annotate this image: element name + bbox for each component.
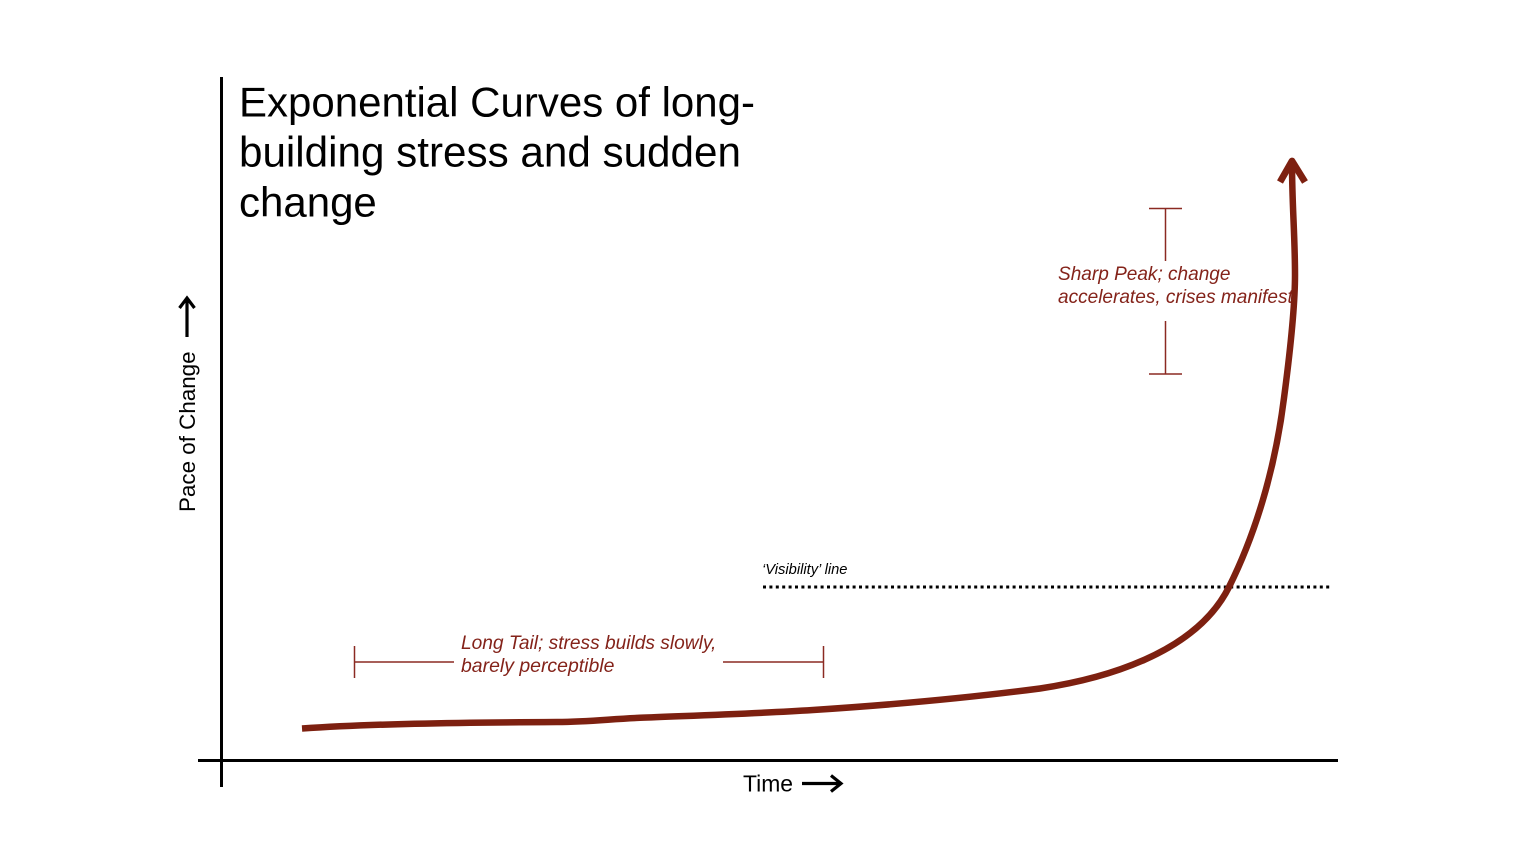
title: building stress and sudden <box>239 128 741 176</box>
x axis <box>198 759 1338 762</box>
x axis label <box>743 770 841 796</box>
title: change <box>239 178 377 226</box>
icon: x axis arrow <box>802 776 841 792</box>
sharp peak bracket <box>1149 208 1182 374</box>
icon: y axis arrow <box>180 298 194 337</box>
icon: curve arrowhead <box>1280 161 1305 182</box>
x axis label: Time <box>743 770 793 796</box>
y axis <box>220 77 223 787</box>
long tail label: Long Tail; stress builds slowly, <box>461 633 716 654</box>
exponential curve <box>302 163 1295 728</box>
visibility dotted line <box>763 586 1330 588</box>
long tail label: barely perceptible <box>461 655 615 677</box>
visibility label: ‘Visibility’ line <box>762 562 847 578</box>
sharp peak label: Sharp Peak; change <box>1058 264 1230 285</box>
long tail bracket <box>354 646 824 678</box>
y axis label: Pace of Change <box>175 351 200 512</box>
sharp peak label: accelerates, crises manifest <box>1058 287 1294 308</box>
title: Exponential Curves of long- <box>239 78 755 126</box>
